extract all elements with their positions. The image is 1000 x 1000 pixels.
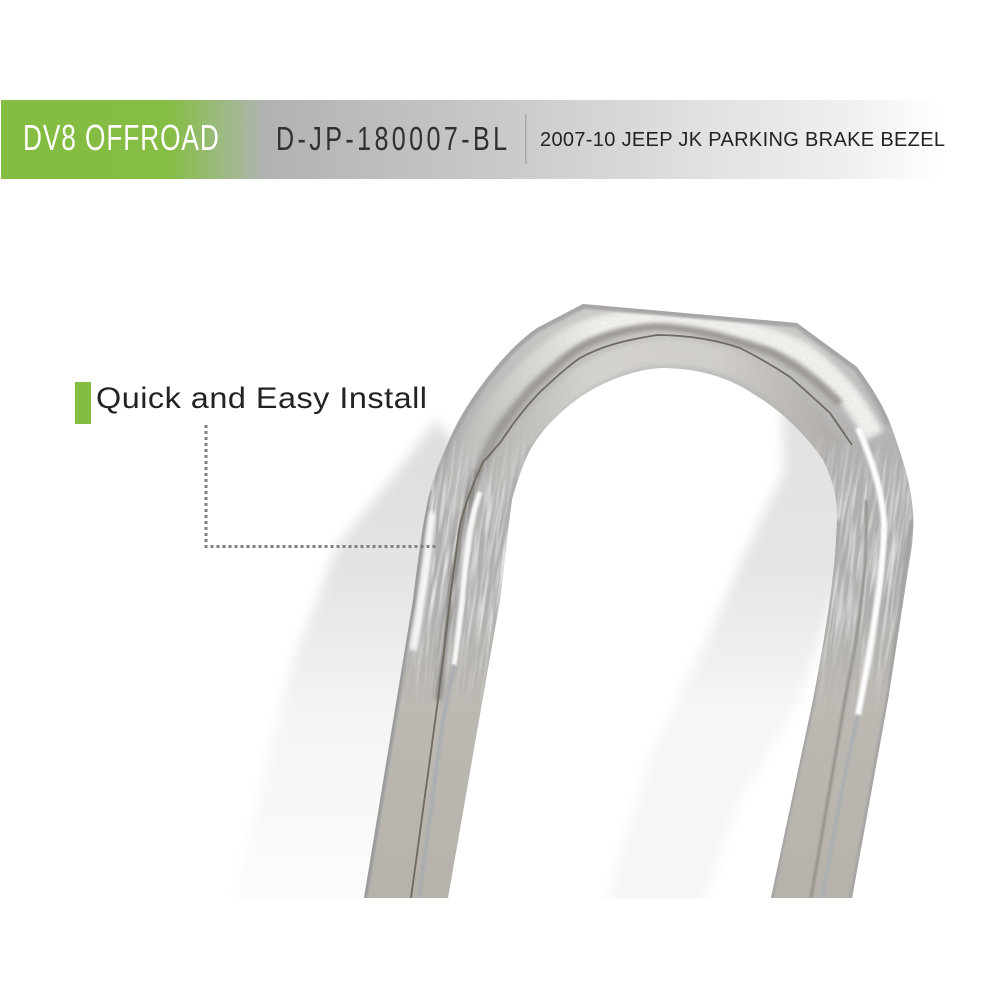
callout text: Quick and Easy Install xyxy=(96,381,427,415)
header divider xyxy=(525,114,526,164)
left leg outer edge shade xyxy=(365,490,430,898)
right cast shadow inside opening xyxy=(615,414,837,898)
bezel metal body xyxy=(364,304,914,898)
left outer white strip xyxy=(413,512,432,650)
cast shadows xyxy=(233,410,860,905)
light top flange xyxy=(452,320,874,510)
dark groove line xyxy=(411,335,852,898)
left lower flange shade xyxy=(438,470,477,700)
callout: quick and easy install xyxy=(75,381,436,546)
right inner edge shade xyxy=(771,520,838,898)
right leg bright highlight xyxy=(858,428,884,715)
outer rim shade on top edge xyxy=(422,304,890,530)
product photo: bezel with cast shadows xyxy=(275,304,914,898)
right leg blue-grey line xyxy=(822,715,858,898)
infographic canvas xyxy=(1,100,944,898)
bright inner ring xyxy=(495,340,758,505)
right leg dark groove xyxy=(811,500,866,898)
fine metal grain xyxy=(502,315,875,572)
left inner white strip xyxy=(454,492,480,665)
part number: D-JP-180007-BL xyxy=(276,121,507,158)
base metal fill xyxy=(364,304,914,898)
header gradient band xyxy=(1,100,940,179)
left inner blue line xyxy=(419,665,454,898)
header bar xyxy=(1,100,945,179)
brand name: DV8 OFFROAD xyxy=(23,117,219,158)
green callout tab xyxy=(75,382,91,424)
product title: 2007-10 JEEP JK PARKING BRAKE BEZEL xyxy=(540,129,945,151)
groove shade band xyxy=(470,327,840,500)
brushed streak texture xyxy=(407,442,913,698)
right outer edge shade xyxy=(852,520,912,898)
left cast shadow xyxy=(275,421,452,780)
dotted leader line xyxy=(206,425,436,546)
